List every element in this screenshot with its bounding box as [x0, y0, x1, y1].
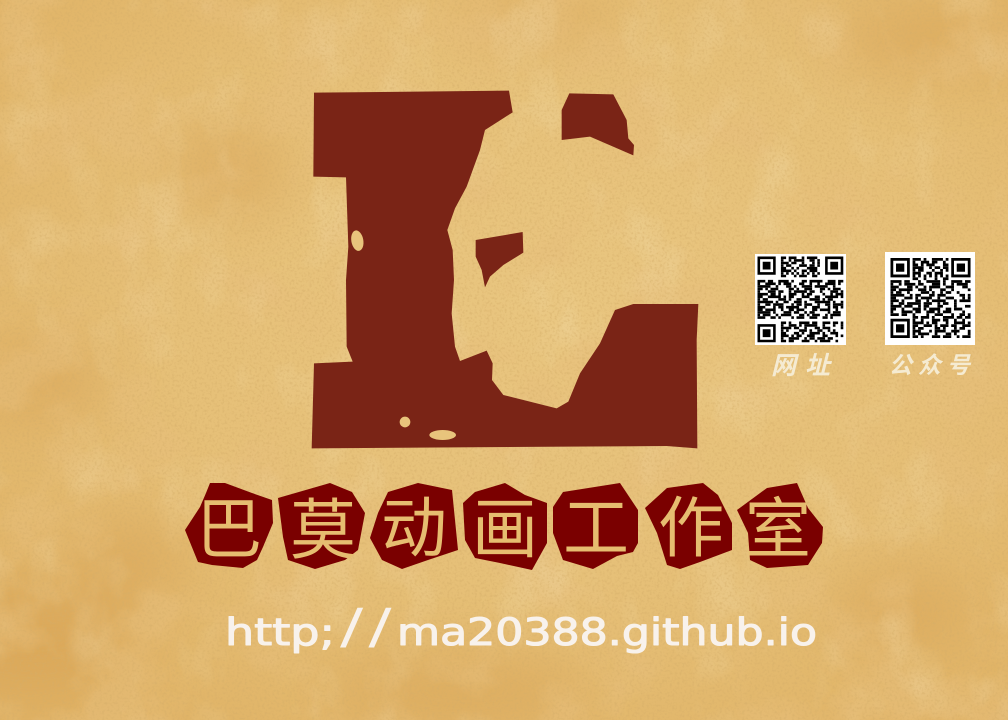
logo upper right fragment [562, 93, 634, 155]
website url [225, 599, 817, 654]
seal: zuo [645, 483, 732, 569]
seal: dong [370, 483, 458, 569]
caption: website: 网址 [771, 352, 839, 380]
url slashes: // [340, 599, 397, 654]
seal: gong: 工 [563, 491, 629, 565]
logo mark [312, 91, 698, 448]
seal: shi [737, 483, 823, 568]
seal: gong [553, 483, 638, 569]
caption: official account: 公众号 [889, 352, 976, 378]
url scheme: http; [225, 611, 335, 654]
seal: hua [463, 483, 547, 570]
seal: shi: 室 [745, 492, 811, 566]
seal: ba: 巴 [196, 492, 262, 566]
logo main body [312, 91, 698, 448]
seal: dong: 动 [381, 491, 447, 565]
QR code: official account [885, 252, 975, 345]
seal: zuo: 作 [658, 491, 724, 565]
QR code: website [755, 254, 846, 345]
logo holes [350, 229, 456, 440]
seal: hua: 画 [472, 492, 538, 566]
url host: ma20388.github.io [397, 611, 817, 654]
seal: ba [185, 483, 273, 568]
logo middle fragment [476, 232, 523, 287]
seal: mo [278, 483, 365, 569]
studio name seals [185, 483, 823, 570]
seal: mo: 莫 [290, 493, 356, 567]
